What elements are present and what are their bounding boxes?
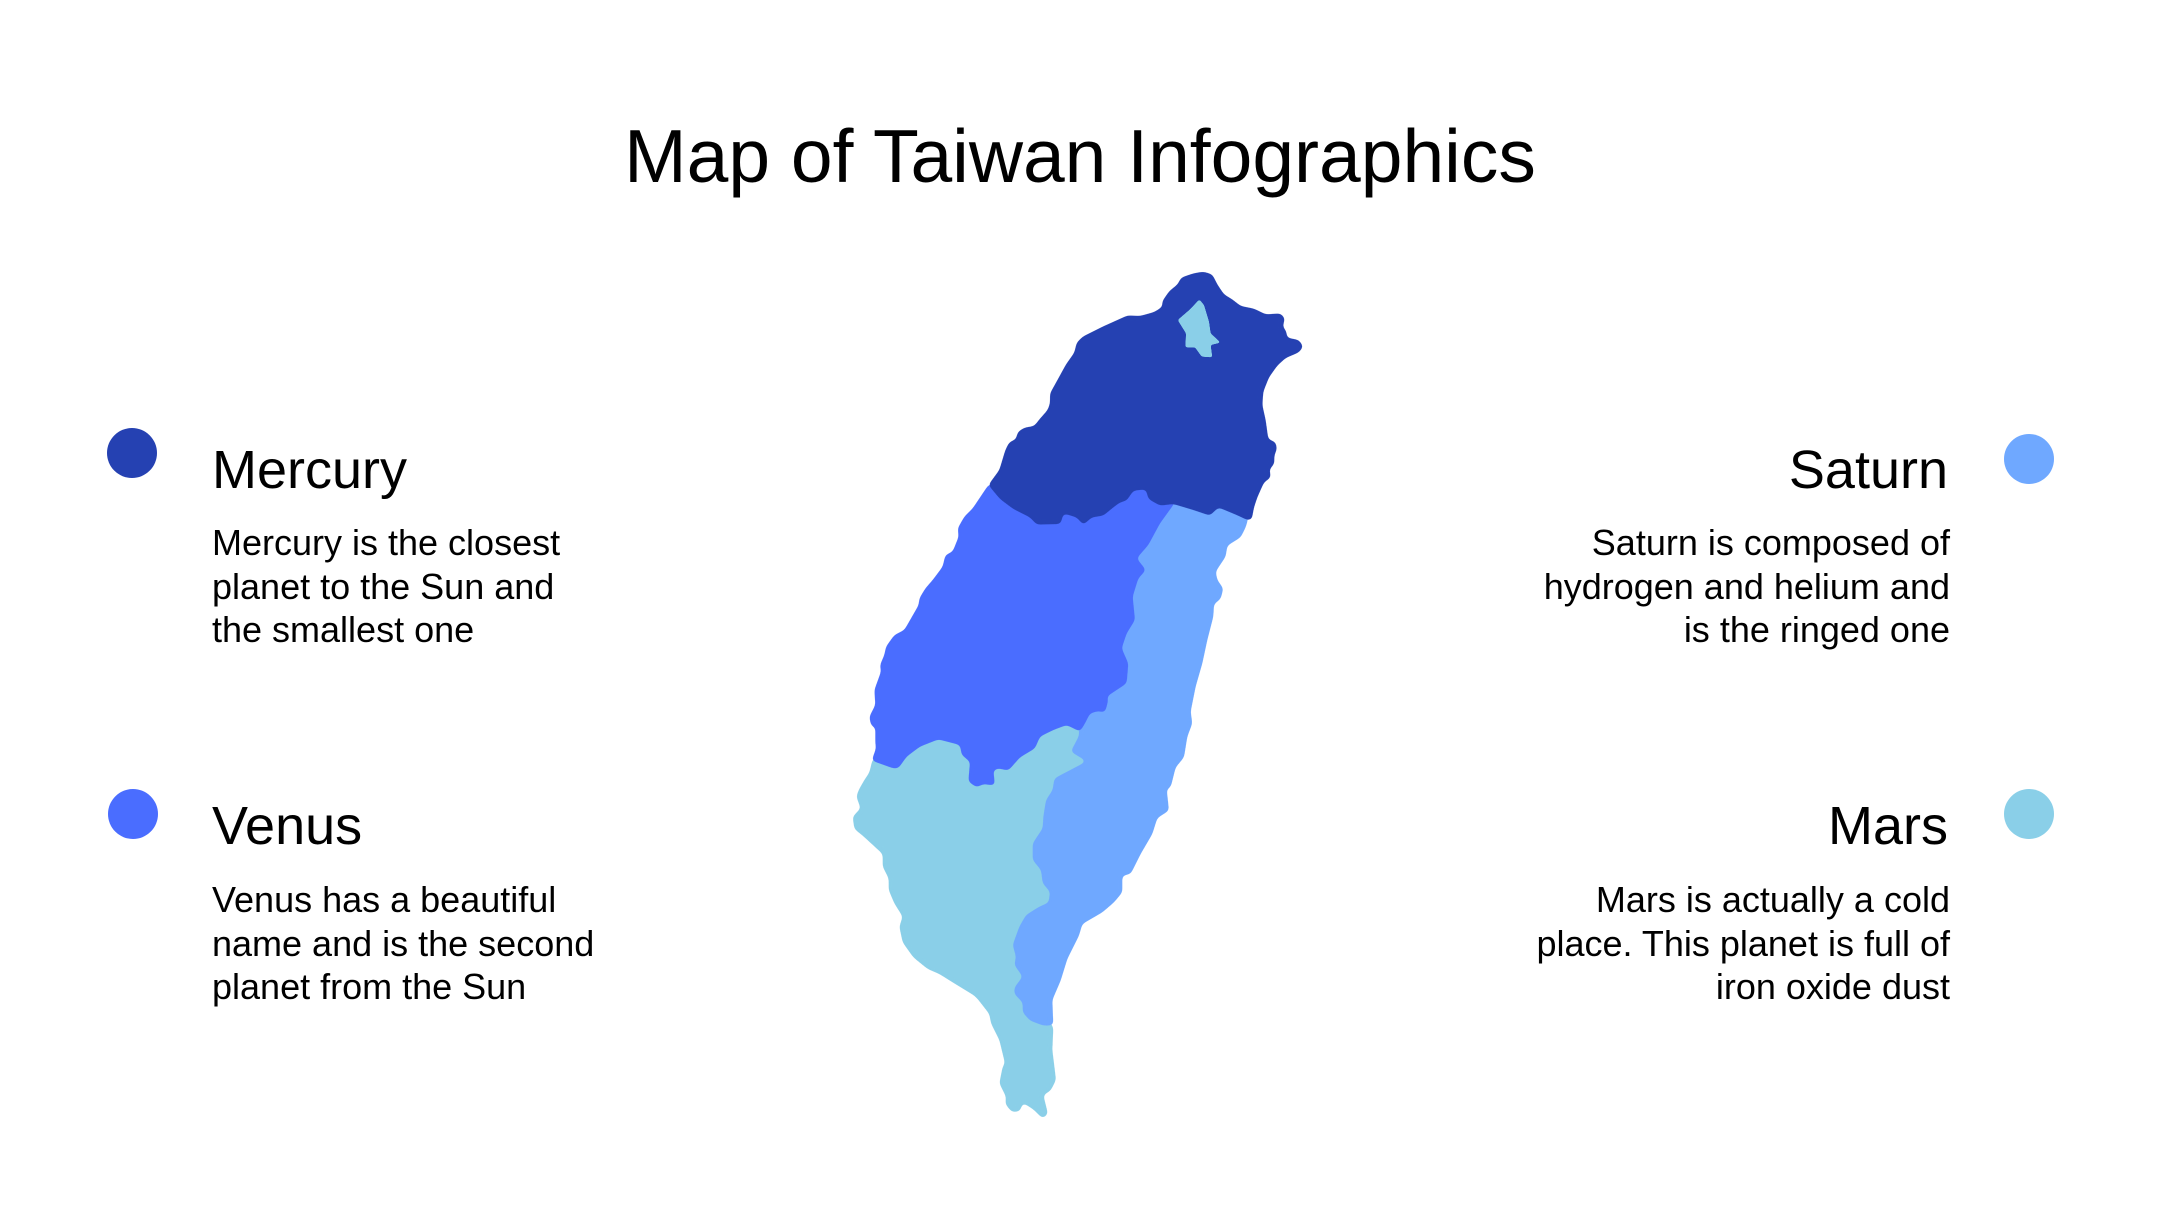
description: Venus: planet from the Sun (212, 966, 526, 1007)
map region: Mars (south-west) (853, 710, 1107, 1119)
map region: Saturn (east) (1013, 490, 1248, 1026)
icon: Saturn legend dot (2004, 434, 2054, 484)
description: Mercury: planet to the Sun and (212, 566, 554, 607)
map region: Venus (central-west) (869, 480, 1180, 787)
map region: Mercury (north) (988, 272, 1303, 525)
description: Venus: Venus has a beautiful (212, 879, 556, 920)
description: Mars: Mars is actually a cold (1596, 879, 1950, 920)
title: Map of Taiwan Infographics (624, 114, 1536, 198)
heading: Mars: Mars (1828, 796, 1948, 856)
map region: Mars (northern enclave) (1178, 299, 1221, 357)
description: Venus (212, 879, 594, 1007)
icon: Venus legend dot (108, 789, 158, 839)
text block: Mars (1536, 796, 1950, 1007)
description: Mars: place. This planet is full of (1536, 923, 1950, 964)
description: Mercury: the smallest one (212, 609, 474, 650)
heading: Venus: Venus (212, 796, 362, 856)
text block: Venus (212, 796, 594, 1007)
description: Mercury: Mercury is the closest (212, 522, 560, 563)
description: Mercury (212, 522, 560, 650)
heading: Saturn: Saturn (1789, 440, 1948, 500)
description: Mars (1536, 879, 1950, 1007)
description: Saturn (1544, 522, 1950, 650)
icon: Mars legend dot (2004, 789, 2054, 839)
description: Saturn: hydrogen and helium and (1544, 566, 1950, 607)
description: Venus: name and is the second (212, 923, 594, 964)
text block: Mercury (212, 440, 560, 650)
text block: Saturn (1544, 440, 1950, 650)
description: Mars: iron oxide dust (1716, 966, 1950, 1007)
description: Saturn: is the ringed one (1684, 609, 1950, 650)
icon: Mercury legend dot (107, 428, 157, 478)
heading: Mercury: Mercury (212, 440, 407, 500)
map of Taiwan (853, 272, 1302, 1117)
description: Saturn: Saturn is composed of (1592, 522, 1950, 563)
